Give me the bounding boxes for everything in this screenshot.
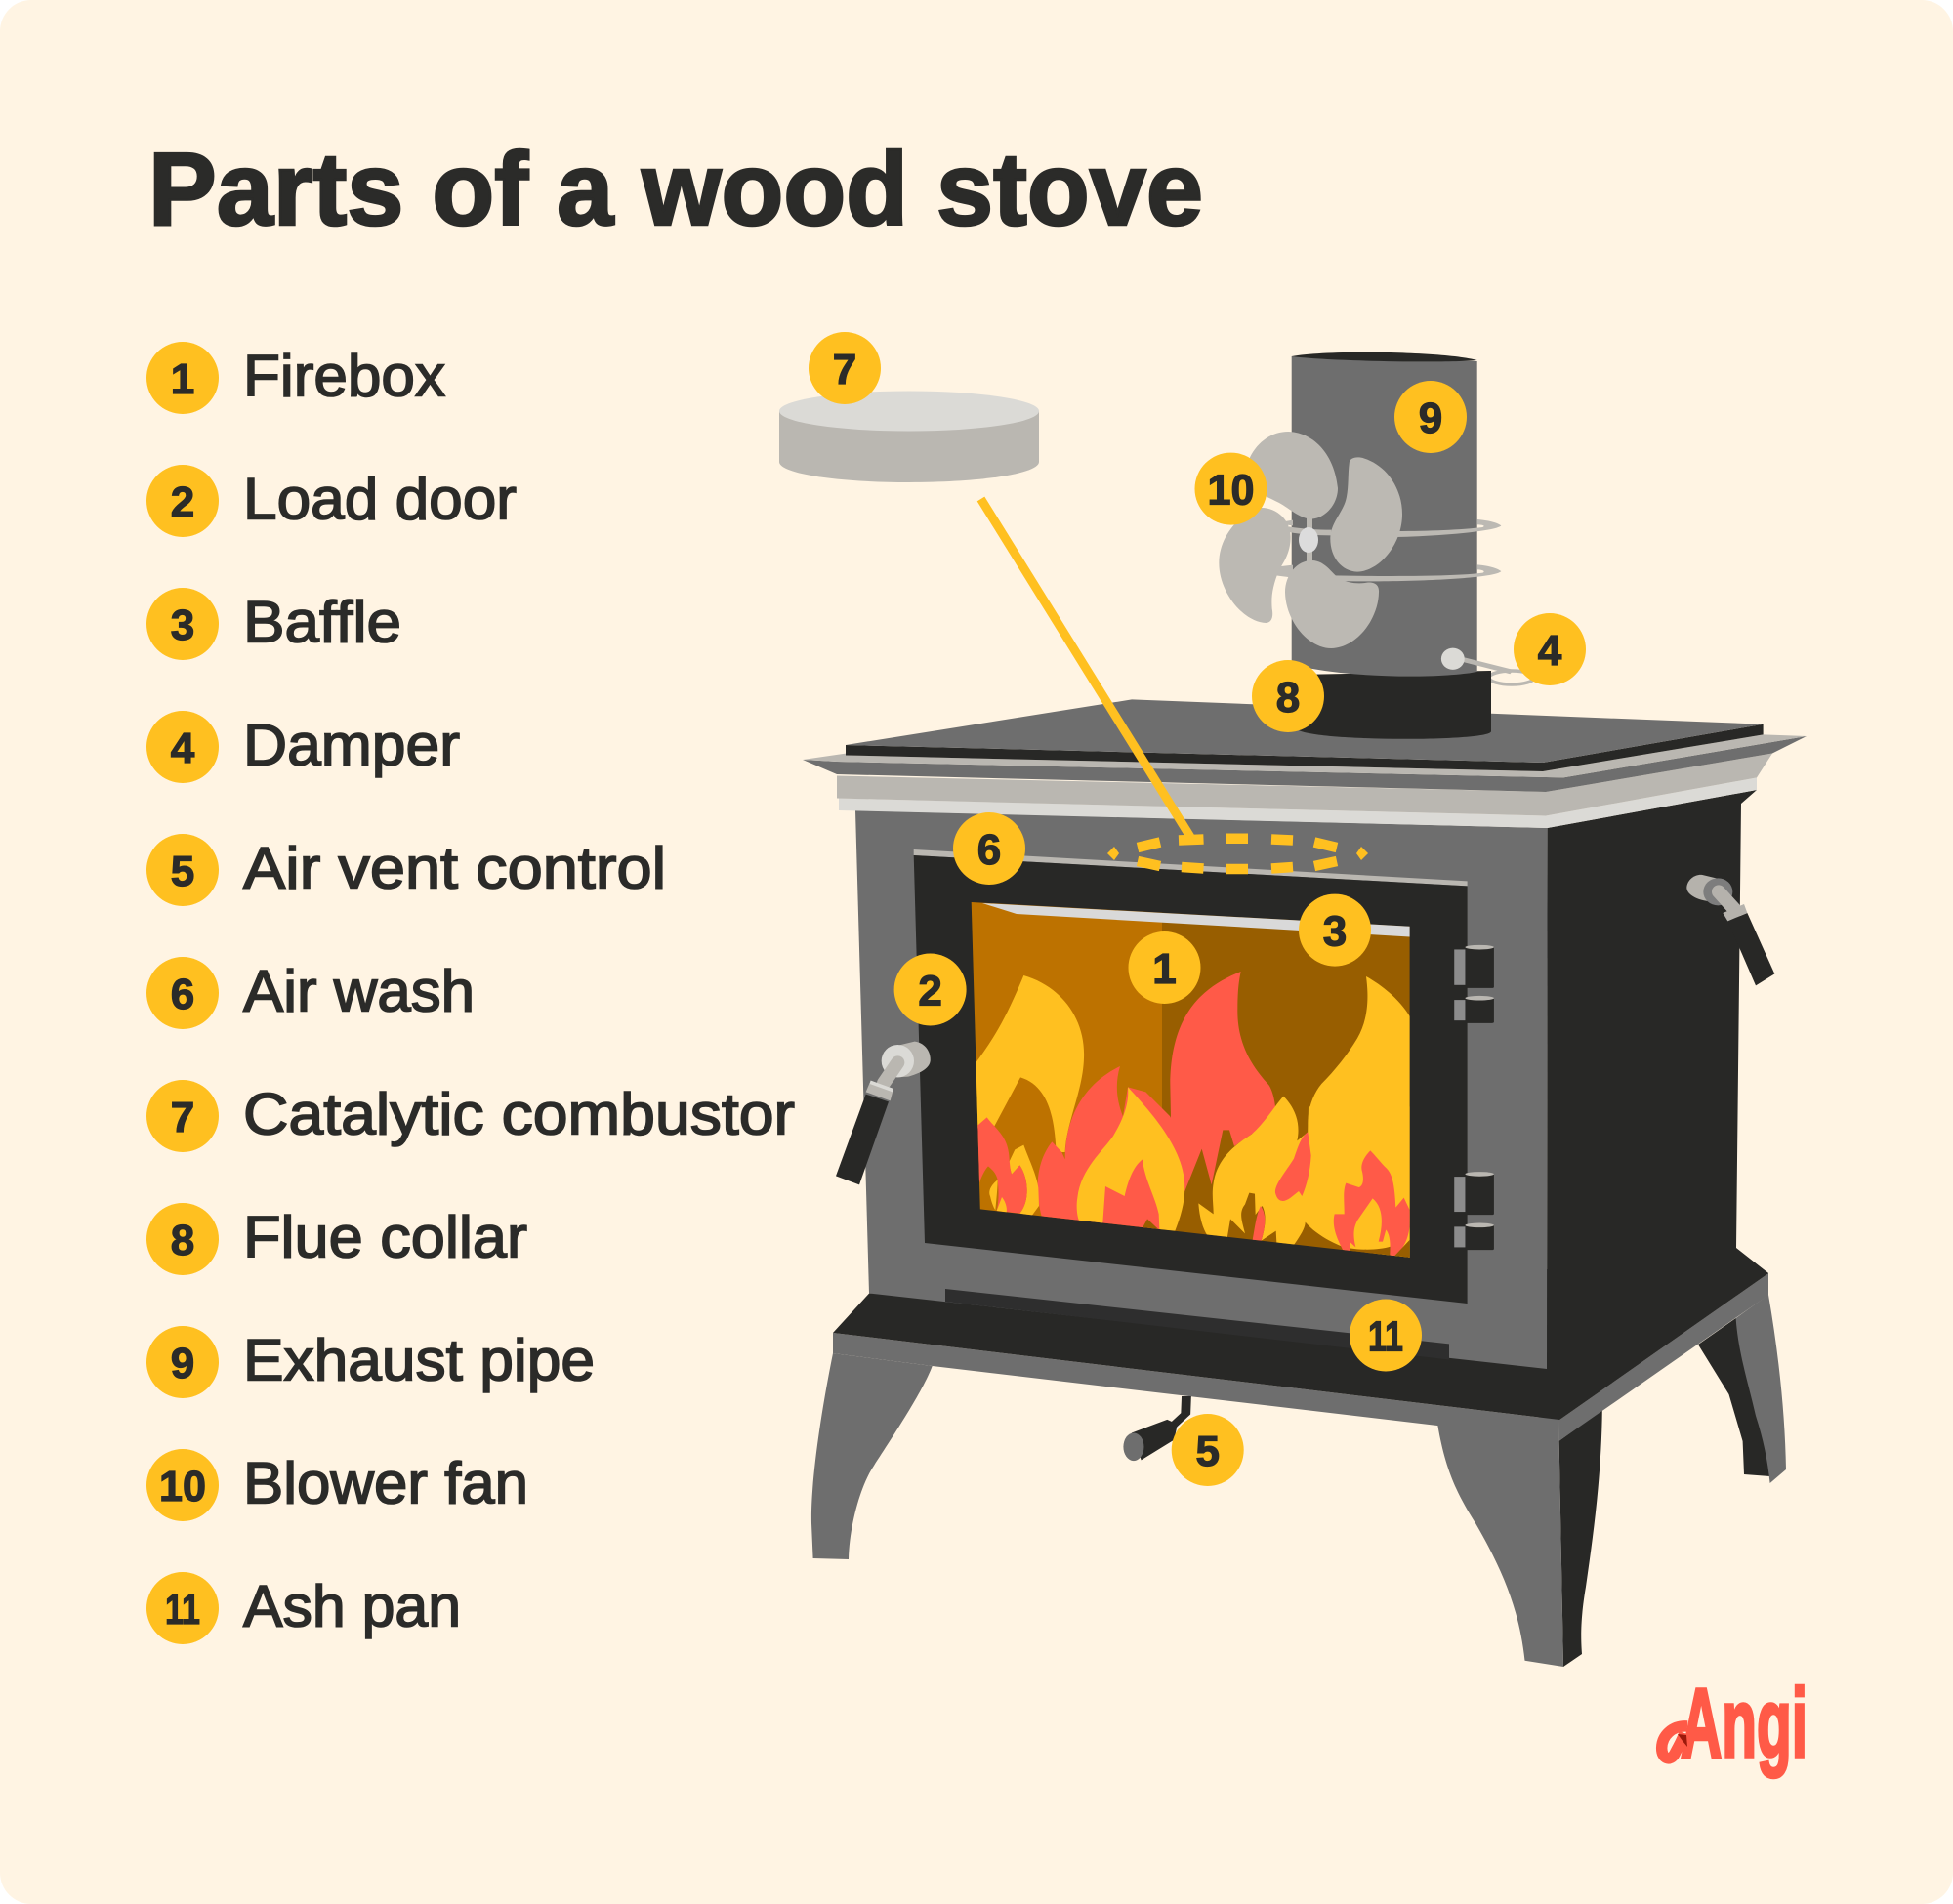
callout 8: 8 xyxy=(1276,674,1300,722)
callout 6 xyxy=(953,812,1025,885)
Angi logo: Angi xyxy=(1681,1669,1808,1778)
callout 1 xyxy=(1129,931,1201,1004)
legend item 5: Air vent control: Air vent control xyxy=(243,836,666,901)
callout 4 xyxy=(1514,613,1586,685)
callout 4: 4 xyxy=(1538,627,1562,675)
firebox window with flames xyxy=(967,898,1416,1269)
fan blade: right xyxy=(1330,457,1402,572)
callout 10: 10 xyxy=(1207,467,1254,515)
legend item 6: Air wash xyxy=(146,957,475,1029)
flame: left small red xyxy=(975,1117,1027,1214)
legend item 7: Catalytic combustor: 7 xyxy=(171,1094,194,1141)
legend item 11: Ash pan xyxy=(146,1572,461,1644)
stove top plate xyxy=(846,699,1764,771)
fan wires xyxy=(1276,516,1501,581)
title: Parts of a wood stove xyxy=(148,132,1203,247)
legend item 4: Damper xyxy=(146,711,460,783)
front left leg xyxy=(811,1353,933,1559)
callout 3: 3 xyxy=(1323,908,1347,956)
callout 3 xyxy=(1299,894,1371,967)
legend item 3: Baffle: 3 xyxy=(171,601,194,649)
load door frame xyxy=(914,849,1468,1304)
legend item 8: Flue collar xyxy=(146,1203,527,1275)
callout 6: 6 xyxy=(977,826,1001,874)
legend item 10: Blower fan: 10 xyxy=(159,1463,206,1511)
callout 11: 11 xyxy=(1368,1312,1403,1361)
legend item 11: Ash pan: Ash pan xyxy=(243,1574,461,1639)
legend item 4: Damper: 4 xyxy=(171,724,195,772)
cap mouldings xyxy=(803,734,1807,828)
baffle xyxy=(982,903,1410,937)
Angi logo xyxy=(1662,1669,1808,1778)
flame: right seam red xyxy=(1275,1132,1311,1201)
legend item 1: Firebox: Firebox xyxy=(243,344,445,409)
flame: left red xyxy=(1038,1066,1184,1230)
callout 2 xyxy=(894,953,967,1025)
callout 9: 9 xyxy=(1419,394,1442,442)
callout 5 xyxy=(1172,1414,1244,1486)
flame: lower right yellow mass xyxy=(1198,1097,1414,1260)
flue collar xyxy=(1296,671,1491,739)
ash pan xyxy=(945,1289,1449,1359)
callout 7 xyxy=(809,332,881,404)
legend item 5: Air vent control: 5 xyxy=(171,848,194,895)
catalytic combustor puck xyxy=(779,391,1039,482)
air wash dashed outline xyxy=(1107,839,1368,869)
legend item 6: Air wash: 6 xyxy=(171,971,194,1018)
door hinges xyxy=(1454,945,1494,1250)
flame: bottom right red xyxy=(1350,1246,1391,1256)
leader line: catalytic combustor to air wash xyxy=(980,499,1190,837)
wood stove illustration xyxy=(803,352,1807,1667)
flame: centre red xyxy=(1170,972,1275,1191)
callout 8 xyxy=(1252,660,1324,732)
legend item 7: Catalytic combustor: Catalytic combustor xyxy=(243,1082,795,1147)
fan hub xyxy=(1299,527,1318,553)
legend item 6: Air wash: Air wash xyxy=(243,959,475,1024)
flame: centre yellow xyxy=(1077,1087,1184,1231)
damper ring xyxy=(1489,671,1534,684)
fan blade: bottom xyxy=(1285,560,1379,648)
legend item 1: Firebox: 1 xyxy=(171,355,194,403)
exhaust pipe xyxy=(1292,352,1477,677)
flame: large left yellow xyxy=(969,975,1084,1152)
legend item 5: Air vent control xyxy=(146,834,666,906)
stove side xyxy=(1547,790,1768,1420)
callout 9 xyxy=(1394,381,1467,453)
door handle xyxy=(836,1042,931,1184)
callout 2: 2 xyxy=(918,967,942,1015)
base platform xyxy=(833,1248,1768,1441)
flame: left ember yellow xyxy=(989,1180,1007,1212)
front right leg xyxy=(1437,1410,1602,1667)
legend item 2: Load door xyxy=(146,465,517,537)
back right leg xyxy=(1698,1295,1786,1483)
legend item 9: Exhaust pipe xyxy=(146,1326,595,1398)
flame: left small yellow xyxy=(1009,1145,1039,1216)
air vent lever xyxy=(1123,1396,1186,1461)
callout 7: 7 xyxy=(833,346,856,393)
blower fan xyxy=(1219,432,1501,648)
legend item 8: Flue collar: Flue collar xyxy=(243,1205,527,1270)
legend item 4: Damper: Damper xyxy=(243,713,460,778)
legend item 1: Firebox xyxy=(146,342,445,414)
fan blade: top xyxy=(1247,432,1338,519)
legend item 9: Exhaust pipe: Exhaust pipe xyxy=(243,1328,595,1393)
fan blade: left xyxy=(1219,508,1291,623)
legend item 3: Baffle xyxy=(146,588,401,660)
legend item 10: Blower fan xyxy=(146,1449,528,1521)
damper rod and disc xyxy=(1441,648,1512,672)
side handle xyxy=(1686,875,1774,985)
legend item 11: Ash pan: 11 xyxy=(165,1586,200,1634)
stove front body xyxy=(855,810,1548,1369)
legend item 8: Flue collar: 8 xyxy=(171,1217,194,1264)
legend item 2: Load door: Load door xyxy=(243,467,517,532)
legend item 9: Exhaust pipe: 9 xyxy=(171,1340,194,1387)
callout 10 xyxy=(1195,453,1267,525)
flame: tall right yellow xyxy=(1308,976,1414,1262)
legend list xyxy=(146,342,795,1644)
legend item 2: Load door: 2 xyxy=(171,478,194,526)
legend item 3: Baffle: Baffle xyxy=(243,590,401,655)
callout 5: 5 xyxy=(1195,1428,1220,1475)
flame: small red lick xyxy=(1253,1206,1265,1241)
callout 1: 1 xyxy=(1152,945,1177,993)
legend item 10: Blower fan: Blower fan xyxy=(243,1451,528,1516)
callout 11 xyxy=(1350,1299,1422,1371)
